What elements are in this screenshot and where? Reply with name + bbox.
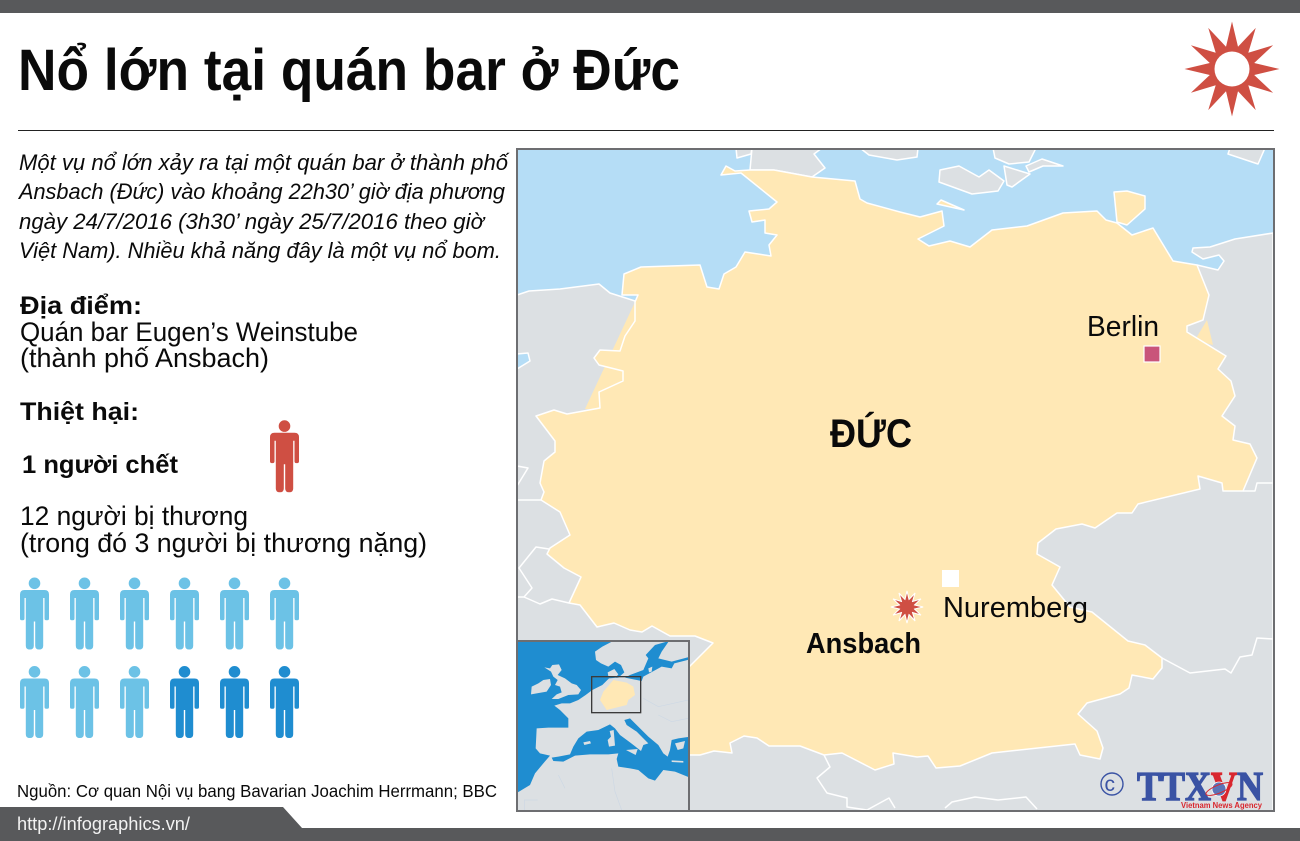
Germany — [536, 166, 1257, 770]
icon: explosion burst — [1184, 22, 1280, 116]
Crete — [672, 760, 683, 763]
neighbour borders — [517, 466, 1273, 810]
pictogram: 12 injured people — [20, 578, 299, 738]
inset: Europe locator map — [515, 640, 690, 811]
neighbouring land — [517, 233, 1273, 812]
intro text block — [17, 150, 510, 263]
intro text block: ngày 24/7/2016 (3h30’ ngày 25/7/2016 theo giờ — [19, 209, 486, 234]
Great Britain — [544, 664, 581, 699]
injured label: 12 người bị thương — [20, 501, 248, 531]
icon: Ansbach explosion marker — [891, 591, 923, 623]
country label: ĐỨC — [830, 410, 912, 456]
globe — [1205, 780, 1233, 798]
Corsica and Sardinia — [608, 730, 615, 747]
Baltic Sea — [625, 641, 690, 681]
source note: Nguồn: Cơ quan Nội vụ bang Bavarian Joachim Herrmann; BBC — [17, 781, 497, 801]
Atlantic and North Sea — [515, 640, 624, 793]
copyright symbol: c — [1104, 773, 1115, 796]
logo: TTXVN — [1101, 763, 1263, 810]
copyright symbol — [1101, 773, 1123, 796]
intro text block: Ansbach (Đức) vào khoảng 22h30’ giờ địa phương — [17, 179, 505, 204]
deaths label: 1 người chết — [22, 451, 179, 479]
Germany highlight — [600, 680, 635, 710]
panel border — [517, 149, 1274, 811]
Ireland — [531, 679, 551, 694]
Balearic islands — [583, 741, 591, 745]
TTXVN wordmark: TTXVN — [1137, 763, 1263, 809]
location text: (thành phố Ansbach) — [20, 343, 269, 373]
agency name: Vietnam News Agency — [1181, 800, 1262, 810]
injured label — [20, 501, 427, 558]
location text: Quán bar Eugen’s Weinstube — [20, 317, 358, 347]
Denmark and northern islands — [736, 148, 1265, 194]
Mediterranean Sea — [552, 718, 690, 781]
lake — [517, 353, 530, 369]
footer url: http://infographics.vn/ — [17, 814, 190, 834]
Nuremberg marker — [942, 570, 959, 587]
location text — [20, 317, 358, 373]
Berlin marker — [1144, 346, 1160, 362]
Sicily — [626, 749, 638, 755]
Gotland — [648, 667, 652, 672]
location heading: Địa điểm: — [20, 292, 142, 320]
intro text block: Việt Nam). Nhiều khả năng đây là một vụ nổ bom. — [19, 238, 501, 263]
Denmark — [608, 669, 618, 678]
injured label: (trong đó 3 người bị thương nặng) — [20, 528, 427, 558]
footer bar — [0, 807, 1300, 841]
Nuremberg label: Nuremberg — [943, 592, 1088, 624]
location block — [20, 292, 358, 373]
panel: map of Germany — [517, 148, 1274, 812]
Berlin label: Berlin — [1087, 311, 1159, 343]
locator square — [592, 677, 641, 713]
intro text block: Một vụ nổ lớn xảy ra tại một quán bar ở thành phố — [19, 150, 510, 175]
faint borders — [524, 698, 688, 810]
German islands — [937, 191, 1145, 225]
damage heading: Thiệt hại: — [20, 398, 139, 426]
title: Nổ lớn tại quán bar ở Đức — [18, 38, 680, 103]
top bar — [0, 0, 1300, 13]
Ansbach label: Ansbach — [806, 628, 921, 660]
misregistered yellow edges — [585, 304, 634, 409]
Aegean islands — [675, 741, 685, 750]
icon: person killed — [270, 420, 299, 492]
